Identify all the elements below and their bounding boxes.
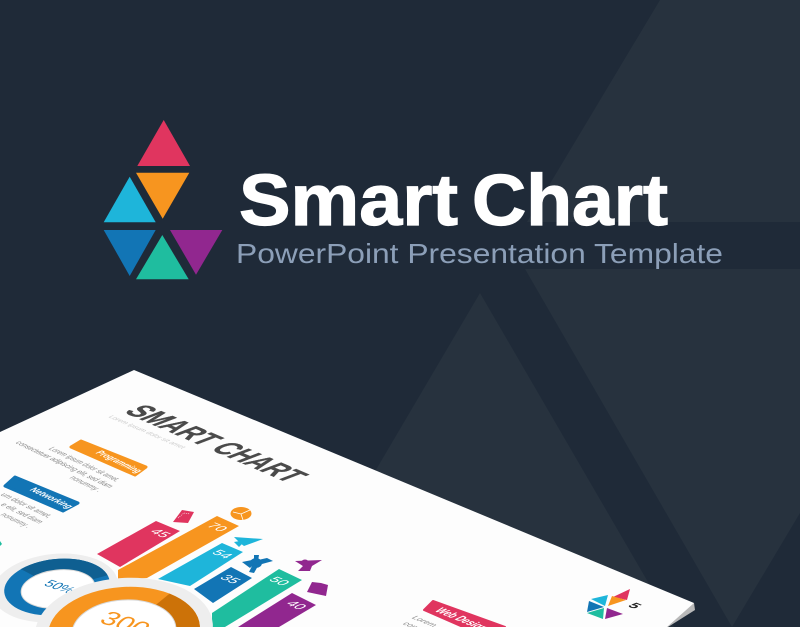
label: Networking [5, 477, 78, 511]
logo: six triangles [104, 120, 222, 279]
slide sub-heading: Lorem ipsum dolor sit amet [106, 414, 189, 450]
icon: paper plane [234, 537, 263, 547]
bar: 70: 70 [203, 521, 232, 533]
text block: Programming: Lorem ipsum dolor sit amet, [46, 446, 123, 482]
text block: Networking: e elit, sed diam [0, 502, 46, 525]
bar: 40 [238, 593, 316, 627]
bar: 40: 40 [282, 599, 311, 611]
bar: 50: 50 [265, 575, 294, 587]
text block: Programming [13, 440, 123, 493]
donut chart: 30% [36, 578, 213, 627]
text block: Programming: nonummy . [67, 475, 105, 493]
bar: 70 [118, 516, 239, 580]
bar: 45 [97, 521, 180, 567]
donut chart: 50%: 50% [40, 578, 79, 596]
icon: globe [230, 507, 252, 520]
label: Programming [71, 441, 146, 475]
bar: 54 [158, 543, 243, 586]
icon: satellite [242, 555, 273, 573]
title: Smart [239, 161, 458, 241]
label: Programming: Programming [92, 449, 145, 474]
subtitle: PowerPoint Presentation Template [236, 238, 723, 269]
slide number: 5 [624, 601, 645, 610]
teal marker [0, 541, 2, 546]
slide edge shadow [640, 603, 695, 627]
bar: 54: 54 [208, 548, 237, 560]
bar: 50 [212, 569, 302, 627]
icon: tag [307, 582, 328, 596]
slide heading: SMART CHART [116, 402, 315, 486]
icon: ticket [173, 510, 194, 523]
slide mockup [0, 370, 695, 627]
title: Chart [472, 161, 668, 241]
donut chart: 50% [0, 554, 117, 622]
text block: Programming: consectetuer adipiscing elit, sed diam [13, 440, 116, 489]
title [239, 161, 668, 241]
text block: Networking: um dolor sit amet, [0, 492, 55, 519]
infographic canvas [0, 120, 722, 627]
icon: figure [295, 560, 322, 571]
label: Networking: Networking [26, 486, 76, 510]
label: Web Design [424, 601, 505, 627]
slide sheet [0, 370, 694, 627]
bar: 35 [194, 567, 252, 603]
bar: 35: 35 [216, 573, 245, 585]
bar: 45: 45 [146, 527, 175, 539]
mini logo [587, 589, 630, 619]
background geometric shapes [347, 0, 800, 627]
